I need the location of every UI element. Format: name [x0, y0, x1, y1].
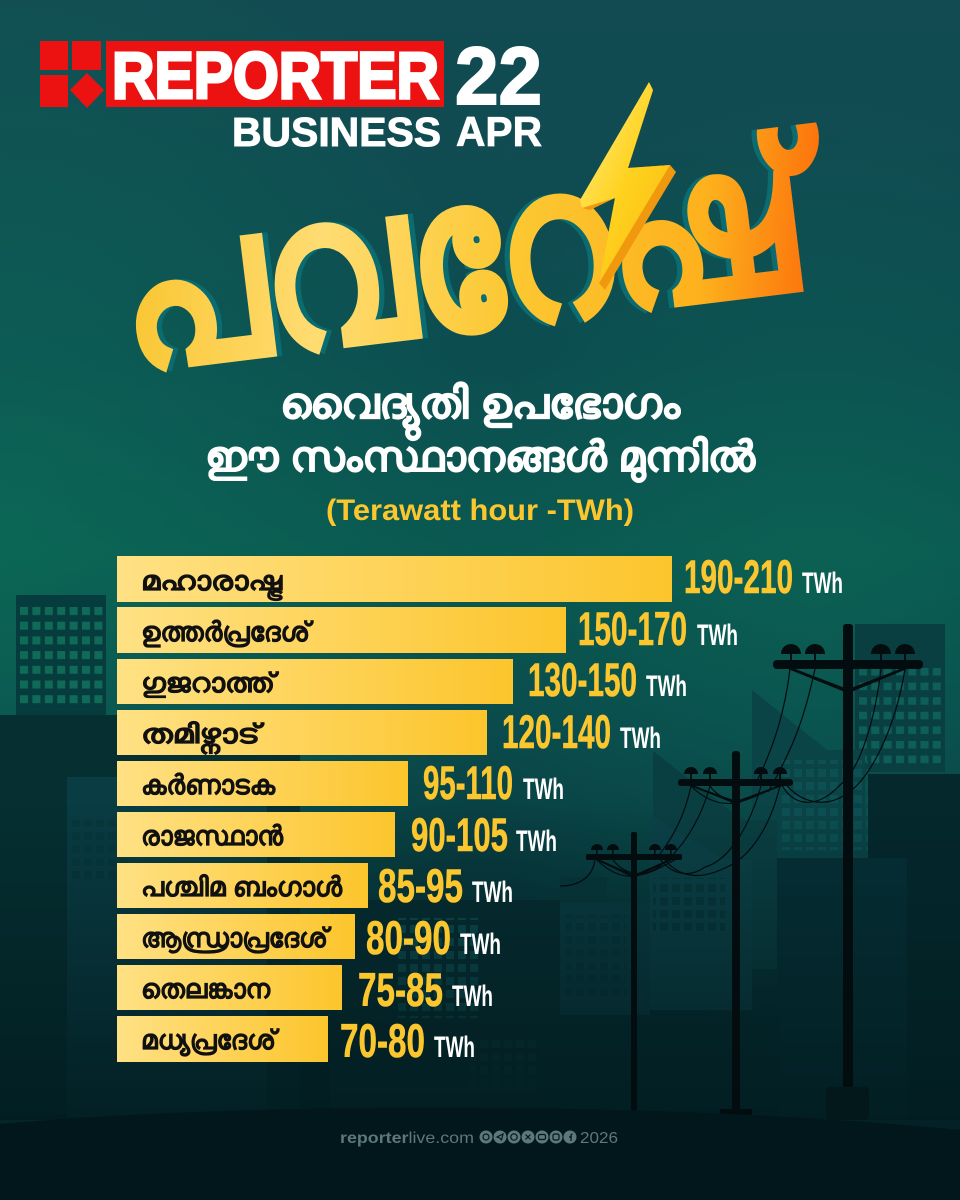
icon: large pole — [773, 624, 923, 1120]
icon: middle pole — [678, 751, 793, 1115]
row: Maharashtra: മഹാരാഷ്ട്ര — [141, 566, 284, 602]
ground — [0, 1107, 960, 1200]
row: Tamil Nadu — [117, 705, 661, 758]
icon: logo squares — [40, 41, 104, 108]
row: Telangana: തെലങ്കാന — [141, 974, 271, 1004]
subtitle: ഈ സംസ്ഥാനങ്ങൾ മുന്നിൽ — [205, 433, 756, 484]
title: power rush: പവറേഷ് — [107, 96, 841, 414]
row: West Bengal: TWh — [472, 876, 513, 909]
business label: BUSINESS — [232, 109, 441, 155]
website: reporter live.com — [340, 1130, 474, 1147]
row: Madhya Pradesh: മധ്യപ്രദേശ് — [141, 1025, 279, 1057]
subtitle — [205, 380, 756, 484]
row: Gujarat: 130-150 — [528, 653, 637, 706]
row: Karnataka: TWh — [523, 773, 564, 806]
row: Maharashtra: 190-210 — [684, 550, 793, 603]
bar chart — [117, 550, 843, 1067]
row: Rajasthan — [117, 808, 557, 861]
row: Tamil Nadu: TWh — [620, 722, 661, 755]
row: Rajasthan: രാജസ്ഥാൻ — [141, 821, 284, 851]
icon: lightning bolt — [580, 82, 676, 290]
row: Karnataka — [117, 756, 564, 809]
row: Gujarat: ഗുജറാത്ത് — [141, 668, 279, 699]
date: 22 — [455, 31, 542, 122]
row: West Bengal: 85-95 — [378, 859, 463, 912]
row: Andhra Pradesh: TWh — [460, 928, 501, 961]
row: Uttar Pradesh — [117, 602, 738, 655]
row: West Bengal — [117, 859, 513, 912]
row: West Bengal: പശ്ചിമ ബംഗാൾ — [141, 872, 343, 902]
logo wordmark: REPORTER — [112, 38, 439, 112]
row: Uttar Pradesh: 150-170 — [578, 602, 687, 655]
subtitle: വൈദ്യുതി ഉപഭോഗം — [280, 380, 681, 441]
wires — [560, 669, 905, 886]
row: Madhya Pradesh: 70-80 — [340, 1014, 425, 1067]
logo: Reporter Business — [40, 38, 444, 155]
row: Andhra Pradesh: ആന്ധ്രാപ്രദേശ് — [141, 923, 331, 954]
unit note: (Terawatt hour -TWh) — [326, 494, 634, 527]
row: Maharashtra — [117, 550, 843, 603]
row: Madhya Pradesh: TWh — [434, 1031, 475, 1064]
icon: small pole — [586, 832, 682, 1112]
row: Uttar Pradesh: TWh — [697, 619, 738, 652]
row: Rajasthan: TWh — [516, 825, 557, 858]
row: Telangana: TWh — [452, 980, 493, 1013]
power poles and wires — [560, 624, 923, 1120]
city skyline — [0, 595, 960, 1120]
row: Gujarat: TWh — [646, 670, 687, 703]
row: Andhra Pradesh: 80-90 — [366, 911, 451, 964]
row: Rajasthan: 90-105 — [411, 808, 508, 861]
title: power rush: പവറേഷ് — [102, 97, 836, 415]
row: Andhra Pradesh — [117, 911, 501, 964]
year: 2026 — [580, 1130, 618, 1147]
row: Tamil Nadu: തമിഴ്നാട് — [141, 719, 264, 756]
title: power rush: പവറേഷ് — [113, 95, 846, 413]
row: Tamil Nadu: 120-140 — [502, 705, 611, 758]
icons: social media — [480, 1130, 576, 1144]
date: APR — [456, 108, 542, 155]
footer — [340, 1130, 618, 1147]
row: Karnataka: കർണാടക — [141, 770, 276, 800]
row: Karnataka: 95-110 — [423, 756, 513, 809]
row: Telangana — [117, 963, 493, 1016]
row: Uttar Pradesh: ഉത്തർപ്രദേശ് — [141, 617, 314, 648]
row: Gujarat — [117, 653, 687, 706]
row: Maharashtra: TWh — [802, 567, 843, 600]
row: Telangana: 75-85 — [358, 963, 443, 1016]
row: Madhya Pradesh — [117, 1014, 475, 1067]
